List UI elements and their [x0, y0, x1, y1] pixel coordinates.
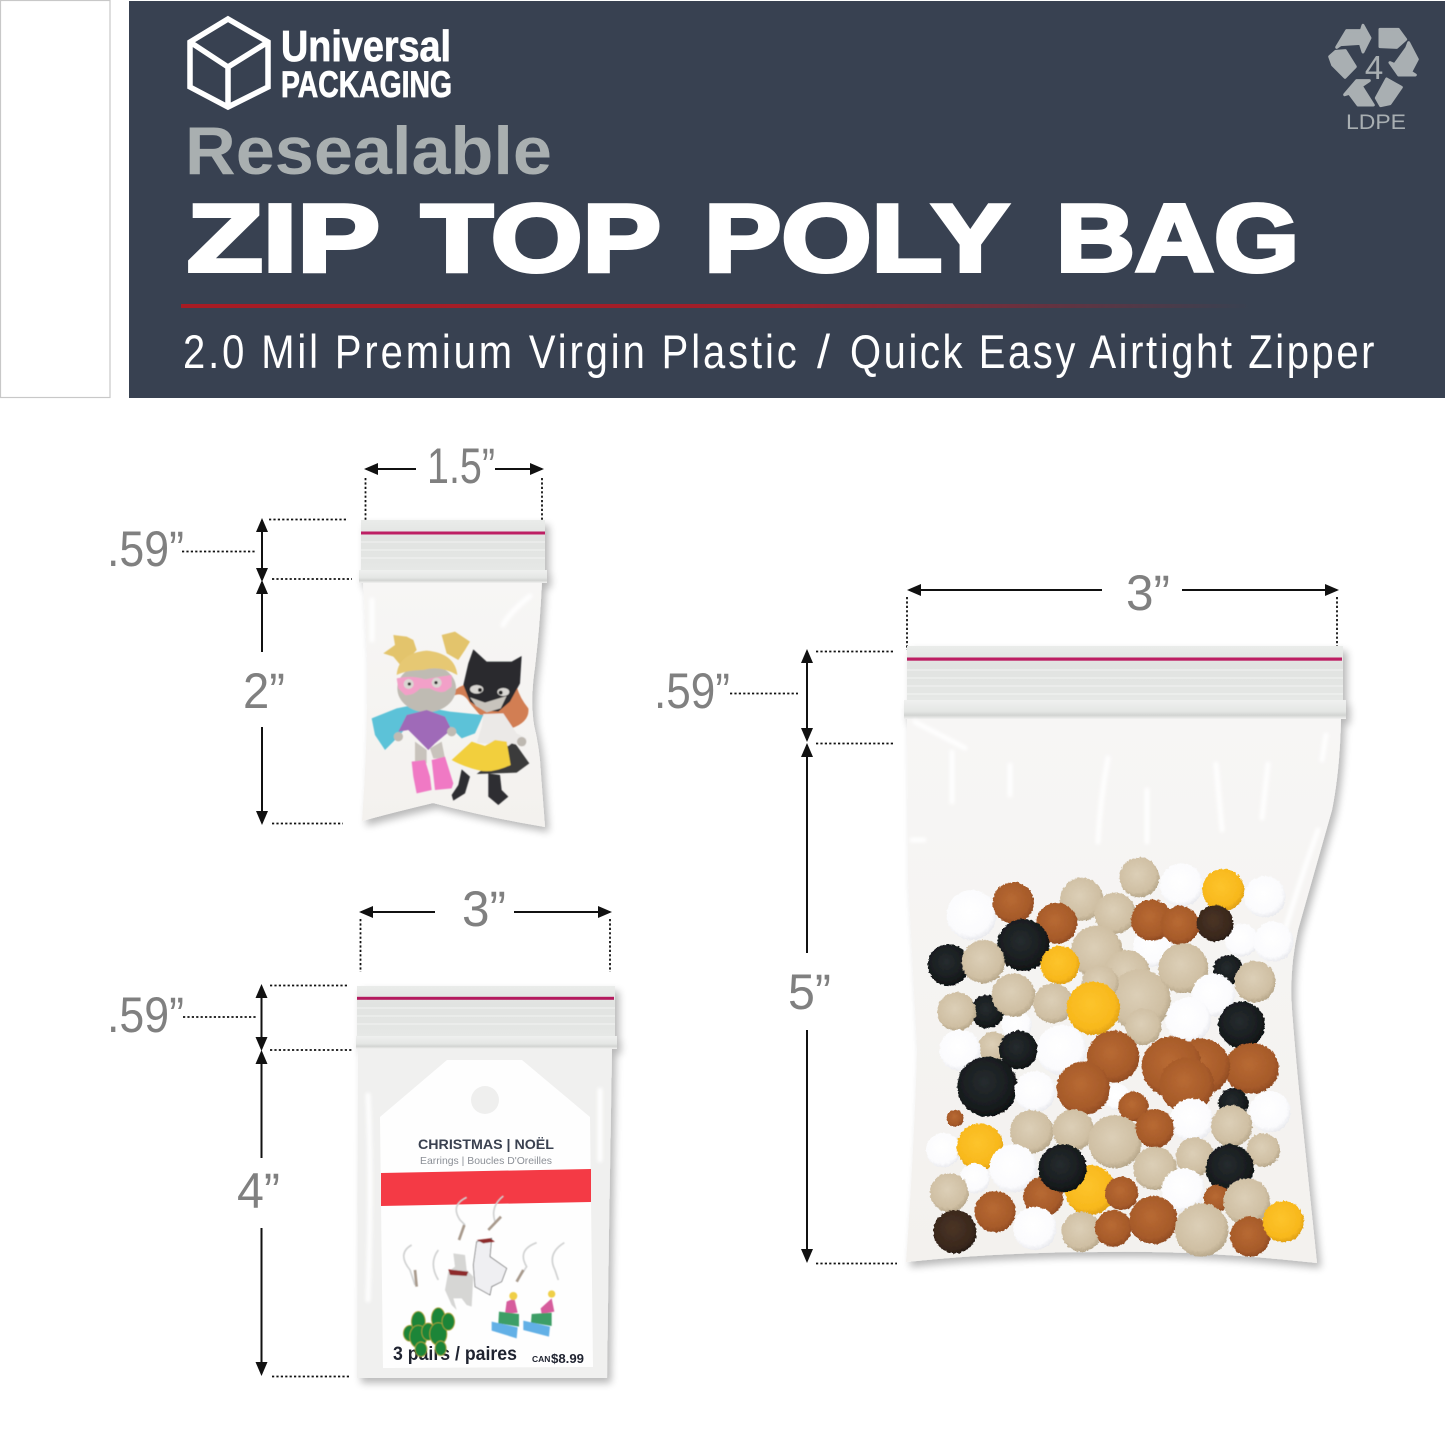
heading: Resealable: Resealable — [185, 113, 552, 189]
header banner — [129, 1, 1445, 398]
large bag with dimensions — [654, 565, 1346, 1264]
width dimension 1.5 inch: 1.5” — [427, 438, 495, 494]
bag highlights — [372, 596, 530, 640]
body height dimension 4 inch: 4” — [237, 1163, 280, 1219]
product card: CHRISTMAS | NOËL — [418, 1136, 554, 1152]
product card: 3 pairs / paires — [393, 1344, 517, 1365]
zipper height dimension .59 inch: .59” — [654, 663, 730, 719]
heading: Zip Top Poly Bag: ZIP — [187, 185, 380, 292]
red divider — [181, 304, 1251, 308]
product card: CAN — [532, 1354, 550, 1364]
width dimension 1.5 inch — [366, 438, 542, 520]
red band — [381, 1169, 591, 1206]
logo wordmark: Universal — [281, 22, 451, 71]
pom-poms — [926, 857, 1304, 1257]
small bag with dimensions — [107, 438, 547, 827]
zipper stripe — [357, 997, 614, 1000]
bag 3 — [904, 646, 1346, 1263]
width dimension 3 inch: 3” — [1126, 565, 1170, 621]
blank left panel — [0, 0, 110, 398]
zipper height dimension .59 inch — [107, 986, 352, 1050]
width dimension 3 inch — [907, 565, 1337, 650]
cat hero — [450, 649, 529, 805]
heading: Zip Top Poly Bag — [187, 185, 1299, 292]
subtitle — [183, 325, 1374, 379]
bag side highlights — [368, 1090, 600, 1300]
product card: $8.99 — [551, 1351, 584, 1366]
icon: cube — [190, 19, 268, 107]
subtitle: / — [817, 325, 831, 378]
zipper stripe — [907, 658, 1342, 661]
heading: Zip Top Poly Bag: BAG — [1056, 185, 1299, 292]
product card: Earrings | Boucles D'Oreilles — [420, 1155, 552, 1167]
bag 2 — [356, 986, 617, 1378]
zipper ribs — [361, 542, 545, 558]
icon: recycling symbol 4 LDPE: LDPE — [1346, 111, 1406, 134]
subtitle: Quick Easy Airtight Zipper — [850, 327, 1374, 379]
toy figures — [372, 632, 529, 805]
icon: recycling symbol 4 LDPE — [1330, 25, 1417, 134]
medium bag with dimensions — [107, 881, 617, 1378]
zipper stripe — [361, 532, 545, 534]
heading: Zip Top Poly Bag: POLY — [704, 185, 1009, 292]
zipper height dimension .59 inch — [654, 651, 895, 744]
subtitle: 2.0 Mil Premium Virgin Plastic — [183, 327, 797, 379]
zipper ribs — [357, 1008, 615, 1024]
width dimension 3 inch: 3” — [462, 881, 506, 937]
logo wordmark: PACKAGING — [281, 64, 452, 105]
logo: Universal Packaging — [190, 19, 452, 107]
product card — [380, 1060, 593, 1368]
body height dimension 5 inch: 5” — [788, 964, 831, 1020]
icon: recycling symbol 4 LDPE: 4 — [1365, 49, 1383, 86]
width dimension 3 inch — [360, 881, 610, 972]
girl hero — [372, 632, 483, 793]
bag 1 — [359, 520, 547, 827]
zipper height dimension .59 inch: .59” — [107, 987, 184, 1043]
zipper ribs — [907, 670, 1343, 694]
logo wordmark — [281, 22, 452, 105]
zipper height dimension .59 inch: .59” — [107, 521, 184, 577]
heading: Zip Top Poly Bag: TOP — [421, 185, 661, 292]
earrings — [403, 1196, 564, 1357]
body height dimension 2 inch: 2” — [243, 663, 285, 719]
zipper height dimension .59 inch — [107, 520, 352, 580]
bag highlights — [912, 722, 1326, 930]
